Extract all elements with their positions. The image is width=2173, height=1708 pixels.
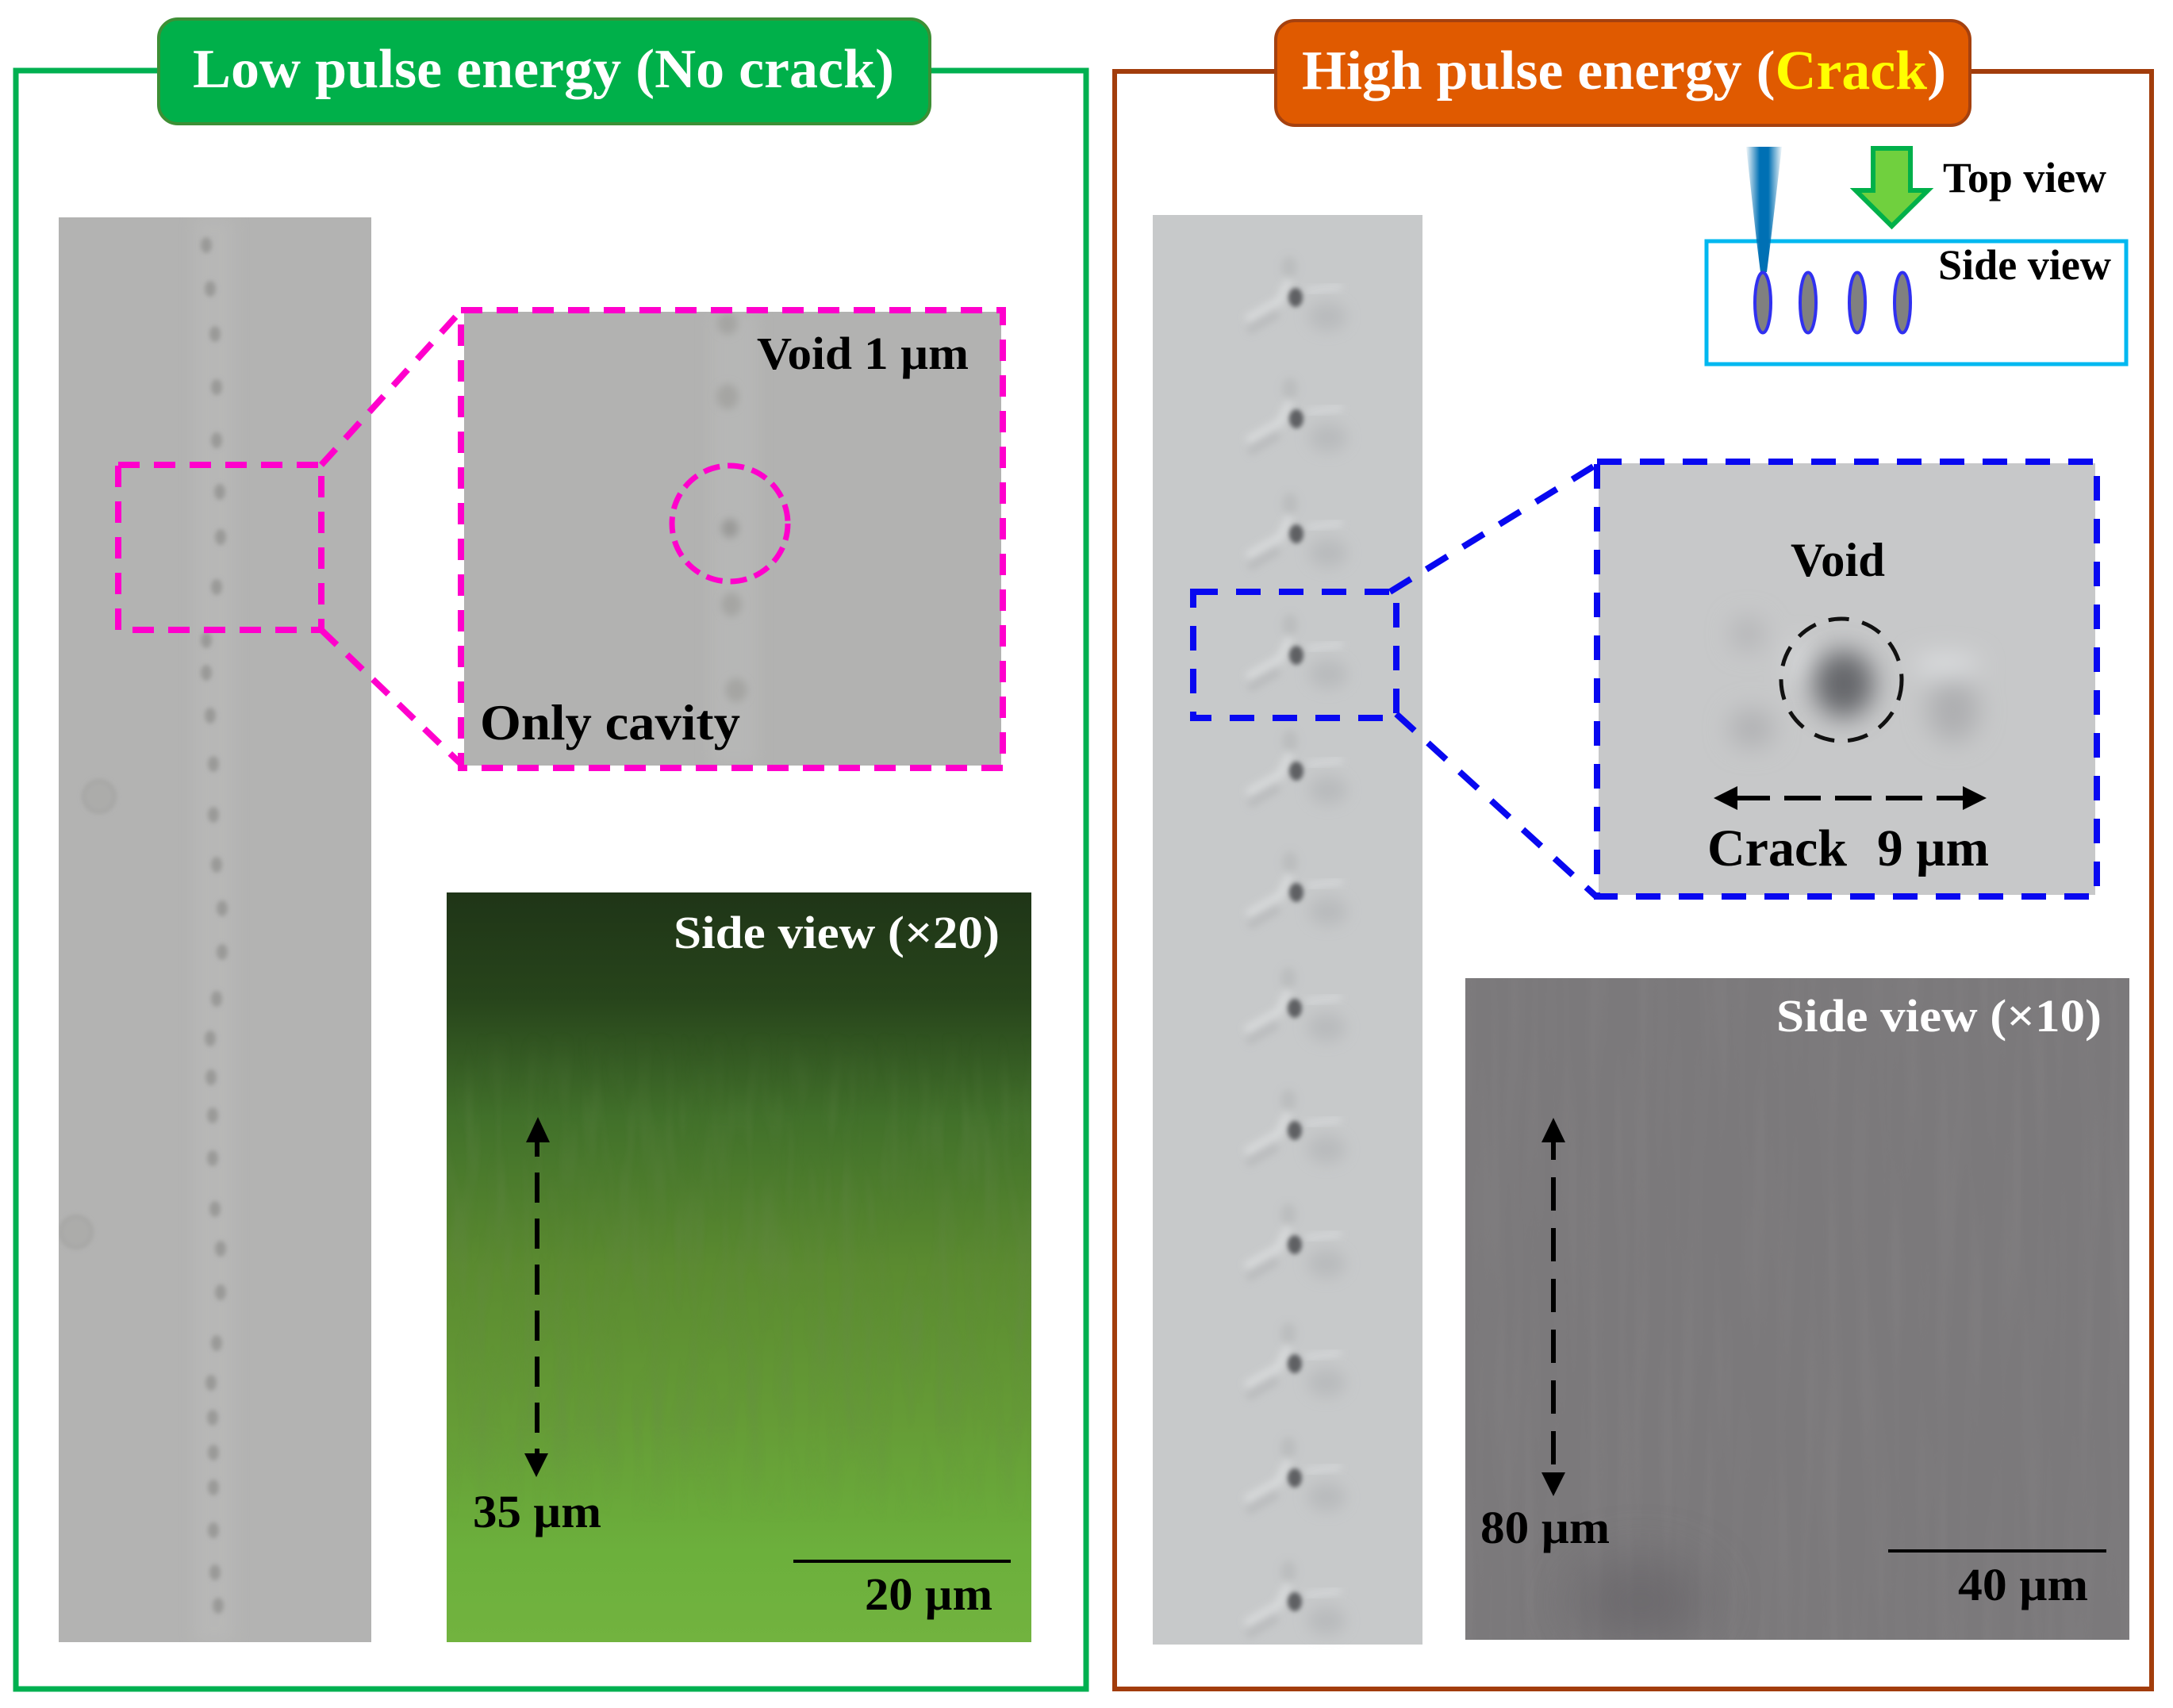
panel frame: green — [16, 71, 1086, 1689]
heading: low pulse energy: Low pulse energy (No crack) — [193, 39, 894, 100]
inset: void and crack close-up — [1597, 462, 2097, 896]
circle marker: void — [672, 466, 788, 581]
label: void: Void — [1791, 534, 1885, 586]
heading: high pulse energy — [1276, 21, 1970, 125]
arrow: depth 35 µm — [524, 1117, 550, 1477]
scale bar: 40 µm — [1888, 1549, 2106, 1610]
heading: low pulse energy — [159, 19, 930, 124]
label: top view: Top view — [1943, 154, 2106, 202]
label: void size: Void 1 µm — [757, 328, 969, 379]
arrow: crack width — [1714, 786, 1987, 810]
icon: top view arrow — [1856, 148, 1928, 226]
label: crack 9 µm: 9 µm — [1877, 819, 1989, 877]
label: side view x10: Side view (×10) — [1776, 990, 2102, 1042]
heading: high pulse energy: High pulse energy (Crack) — [1302, 40, 1946, 102]
label: 35 µm: 35 µm — [473, 1486, 601, 1537]
label: 80 µm: 80 µm — [1480, 1502, 1610, 1553]
inset: void close-up — [461, 310, 1003, 768]
micrograph: green side view — [447, 892, 1031, 1642]
micrograph: top view strip, no cracks — [59, 217, 371, 1642]
icon: voids in side view — [1755, 273, 1910, 333]
label: crack 9 µm: Crack — [1707, 819, 1847, 877]
scale bar: 20 µm: 20 µm — [865, 1568, 992, 1620]
scale bar: 20 µm — [793, 1560, 1011, 1620]
panel: high pulse energy — [1115, 21, 2152, 1689]
box: side view sample — [1707, 241, 2126, 364]
label: side view: Side view — [1938, 241, 2111, 289]
panel frame: brown — [1115, 71, 2152, 1689]
callout: blue selection rectangle and zoom lines — [1193, 466, 1596, 896]
icon: laser beam — [1746, 147, 1782, 272]
callout: magenta selection rectangle and zoom lines — [118, 311, 461, 764]
micrograph: gray side view — [1465, 978, 2129, 1641]
label: only cavity: Only cavity — [480, 694, 740, 750]
diagram: laser beam, top and side view — [1707, 147, 2126, 364]
circle marker: void — [1781, 619, 1902, 741]
label: side view x20: Side view (×20) — [674, 907, 1000, 958]
panel: low pulse energy — [16, 19, 1086, 1689]
label: crack 9 µm — [1707, 819, 1989, 877]
micrograph: top view strip with cracks — [1153, 215, 1422, 1645]
scale bar: 40 µm: 40 µm — [1958, 1559, 2088, 1610]
arrow: depth 80 µm — [1541, 1118, 1565, 1496]
